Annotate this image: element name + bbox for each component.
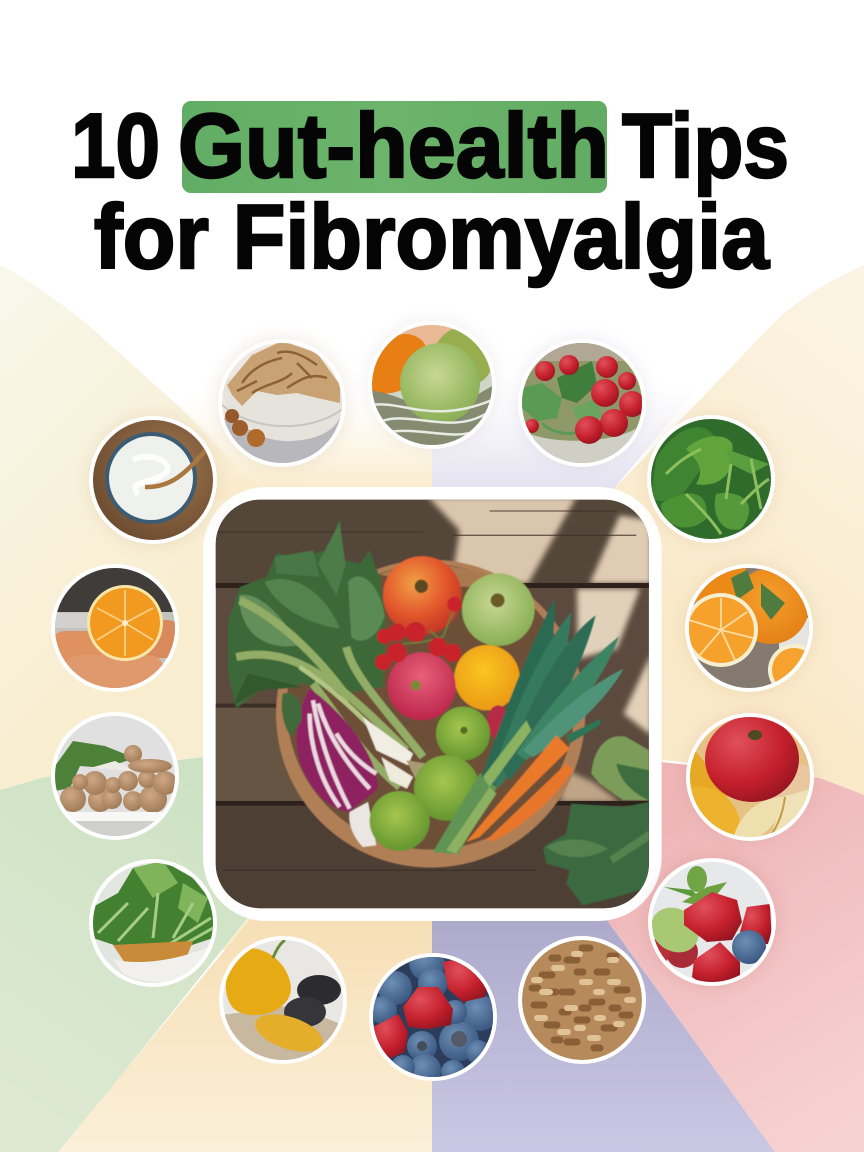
side greens <box>543 736 649 905</box>
apples and citrus <box>370 556 535 851</box>
central photo: bowl of fruit and vegetables <box>203 487 662 921</box>
red currants <box>375 597 462 670</box>
food photo circle: cookies on a plate <box>51 712 179 840</box>
food photo circle: grains <box>518 936 646 1064</box>
food photo circle: red apple and banana <box>684 711 816 843</box>
leeks <box>433 599 624 854</box>
radicchio <box>282 689 378 847</box>
greens bunch <box>228 520 426 789</box>
food photo circle: granola on white dish <box>216 337 348 469</box>
food photo circle: yellow pepper and blackberries <box>219 936 347 1064</box>
food photo circle: blueberries and strawberries <box>369 945 498 1086</box>
food photo circle: red berries with leaves <box>516 337 648 469</box>
carrots <box>466 719 601 842</box>
food photo circle: leafy greens <box>645 413 777 545</box>
title: Tips <box>622 96 789 197</box>
food photo circle: apples in water <box>372 325 492 449</box>
wooden table <box>216 497 651 909</box>
food photo circle: strawberries <box>642 856 778 988</box>
photo frame <box>203 487 662 921</box>
title: Gut-health <box>178 96 609 197</box>
food photo circle: orange half and carrots <box>50 564 182 692</box>
title <box>71 96 789 288</box>
food photo circle: orange slices <box>683 556 820 696</box>
food photo circle: yogurt <box>87 414 219 546</box>
title: for Fibromyalgia <box>94 187 770 288</box>
title: 10 <box>71 96 160 197</box>
food photo circle: greens in a white bowl <box>89 859 217 987</box>
bowl <box>276 560 585 868</box>
title highlight <box>182 101 607 193</box>
